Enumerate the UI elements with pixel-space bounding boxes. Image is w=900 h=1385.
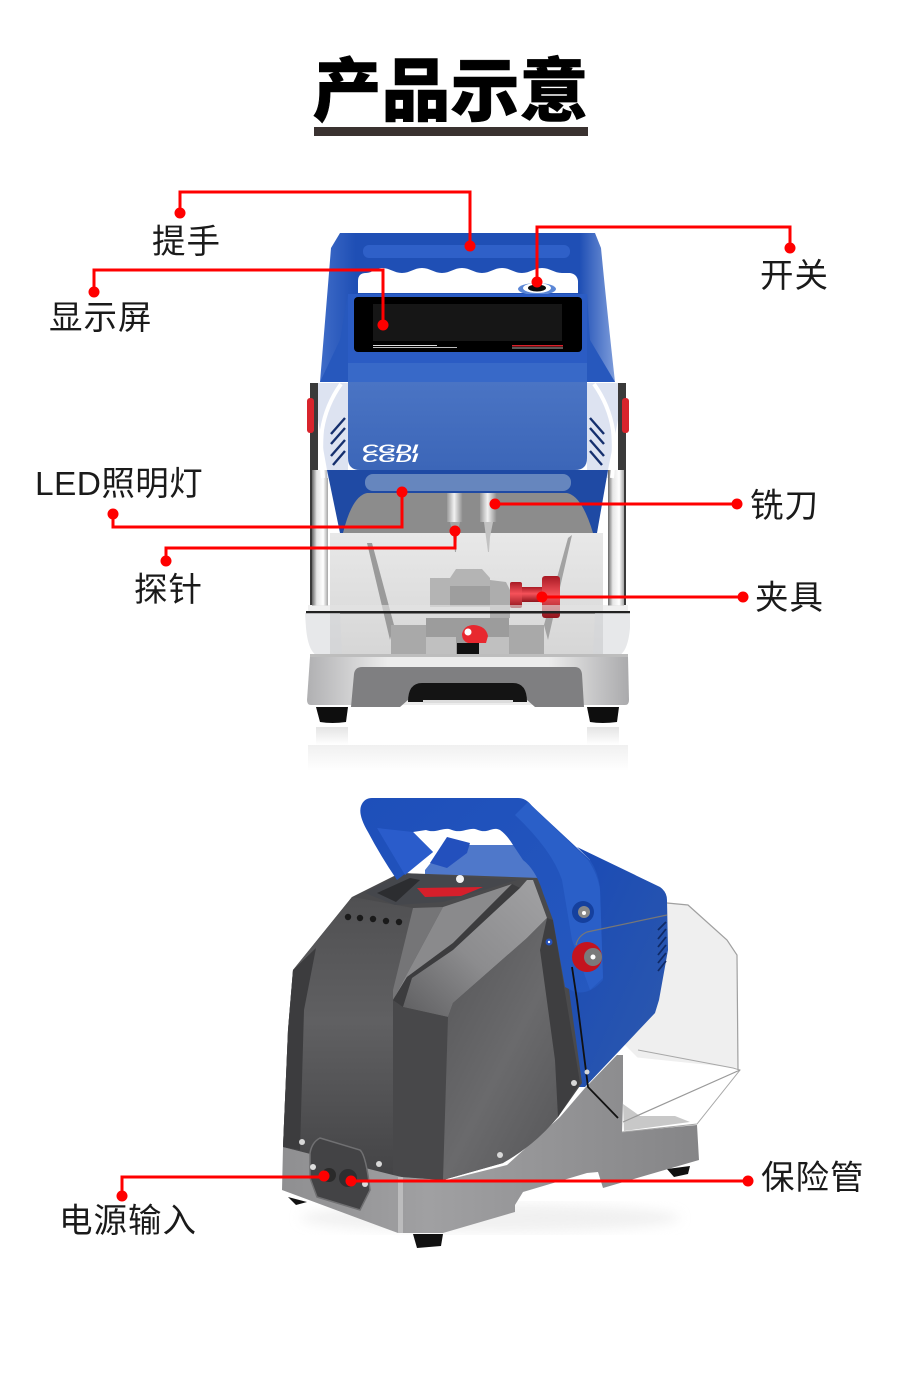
blue cover	[560, 847, 668, 1087]
right rail	[587, 383, 629, 606]
callout: clamp: 夹具	[755, 580, 824, 617]
dark left face	[283, 897, 413, 1175]
product front view	[305, 233, 630, 771]
ground shadow	[300, 1204, 680, 1232]
clear guard pane	[620, 903, 738, 1070]
machine bay	[327, 470, 608, 655]
callout: power input	[59, 1170, 330, 1240]
callout: milling cutter	[490, 488, 819, 525]
port panel	[310, 1138, 370, 1210]
vent holes	[345, 914, 402, 925]
upper body	[320, 294, 615, 382]
callout: display: 显示屏	[49, 300, 152, 337]
feet	[288, 1166, 690, 1248]
cover vents	[658, 922, 666, 971]
brand logo: CGDI	[362, 442, 419, 456]
tray	[622, 1050, 740, 1132]
callout: LED light	[35, 466, 408, 527]
brand logo: CGDI	[362, 451, 419, 465]
product side view	[282, 798, 740, 1248]
guard outline	[572, 903, 738, 1118]
light chamfer face	[403, 880, 547, 1017]
top panel	[365, 873, 517, 905]
callout: fuse	[346, 1160, 864, 1197]
small blue screw	[546, 938, 552, 946]
callout: switch: 开关	[760, 258, 829, 295]
front cover	[348, 382, 587, 470]
body backing	[283, 873, 582, 1180]
side vents	[331, 418, 604, 465]
reflection	[308, 727, 628, 771]
transparent guard	[305, 605, 630, 657]
body screws	[299, 1070, 590, 1167]
callout: switch	[532, 227, 829, 295]
callout: milling cutter: 铣刀	[750, 488, 819, 525]
switch	[518, 283, 556, 295]
left rail	[307, 383, 348, 606]
callout: fuse: 保险管	[761, 1160, 864, 1197]
corner chamfer band	[393, 907, 443, 1000]
callout: probe	[134, 526, 460, 609]
callout: probe: 探针	[134, 572, 203, 609]
rear blue panel	[425, 845, 560, 880]
title: 产品示意	[312, 53, 588, 130]
display screen	[354, 297, 582, 352]
silver base	[282, 1055, 699, 1233]
spindles	[447, 493, 497, 552]
callout: display	[49, 270, 388, 337]
callout: handle: 提手	[152, 224, 221, 261]
base	[307, 657, 629, 723]
main right face	[443, 918, 578, 1180]
clamp	[391, 569, 560, 655]
dark groove	[393, 884, 520, 1010]
brand logo	[362, 442, 419, 465]
carry handle	[360, 798, 603, 992]
callout: LED light: LED照明灯	[35, 466, 203, 503]
callout: power input: 电源输入	[59, 1203, 197, 1240]
callout: handle	[152, 192, 476, 261]
corner column	[393, 1000, 448, 1180]
callout: clamp	[536, 580, 824, 617]
blue pivot knob	[572, 901, 594, 923]
red guard knob	[572, 942, 602, 972]
handle	[320, 233, 615, 382]
